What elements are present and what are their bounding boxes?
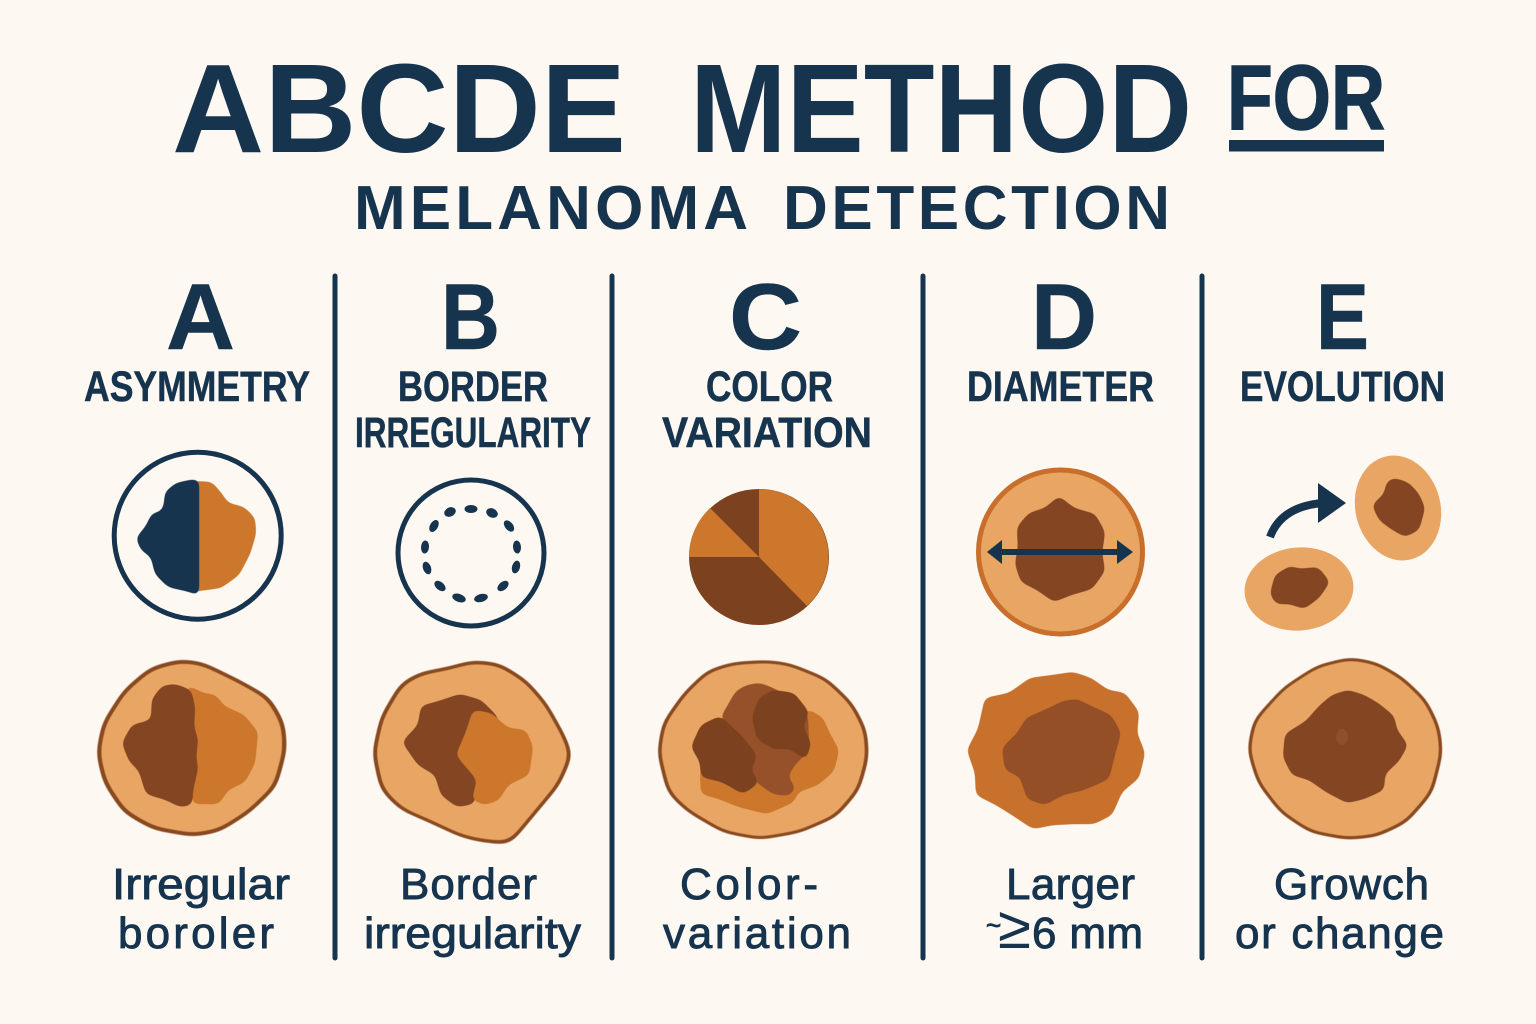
letter C: C xyxy=(729,264,802,369)
title: ABCDE xyxy=(172,38,626,179)
panel: C color variation xyxy=(657,264,872,958)
caption: irregular border: boroler xyxy=(118,909,274,958)
subtitle: MELANOMA xyxy=(354,174,748,243)
caption: color variation: Color- xyxy=(680,860,818,909)
subtitle: DETECTION xyxy=(783,174,1170,243)
caption: larger than 6 mm: Larger xyxy=(1006,860,1135,909)
title: METHOD xyxy=(690,38,1192,179)
icon: dotted border in circle xyxy=(398,480,544,626)
title word: FOR: FOR xyxy=(1227,47,1385,149)
mole illustration: border xyxy=(372,660,573,845)
column dividers xyxy=(335,276,1202,958)
title xyxy=(172,38,1385,179)
letter A: A xyxy=(166,264,235,369)
caption: irregular border: Irregular xyxy=(112,860,290,909)
caption: irregular border xyxy=(112,860,290,958)
icon: diameter measurement xyxy=(978,470,1142,634)
caption: growth or change xyxy=(1235,860,1444,958)
icon: evolving lesion xyxy=(1241,446,1452,635)
heading: diameter: DIAMETER xyxy=(967,363,1154,411)
heading: border irregularity: BORDER xyxy=(398,363,548,411)
caption: border irregularity xyxy=(364,860,581,958)
heading: color variation xyxy=(662,363,872,457)
heading: border irregularity xyxy=(355,363,591,457)
heading: color variation: VARIATION xyxy=(662,409,872,457)
caption: larger than 6 mm: ~ xyxy=(986,910,1001,940)
panel: A asymmetry xyxy=(84,264,310,958)
caption: growth or change: Growch xyxy=(1274,860,1429,909)
caption: growth or change: or change xyxy=(1235,909,1444,958)
letter B: B xyxy=(441,264,500,369)
heading: asymmetry: ASYMMETRY xyxy=(84,363,310,411)
caption: color variation: variation xyxy=(663,909,851,958)
arrow: double-headed width xyxy=(987,540,1133,564)
subtitle xyxy=(354,174,1170,243)
caption: larger than 6 mm: 6 mm xyxy=(1032,909,1143,958)
heading: evolution: EVOLUTION xyxy=(1240,363,1445,411)
icon: color pie chart xyxy=(689,489,829,625)
small lesion: before xyxy=(1241,543,1357,635)
letter D: D xyxy=(1031,264,1097,369)
panel: D diameter xyxy=(967,264,1154,961)
panel: E evolution xyxy=(1235,264,1452,958)
mole illustration: diameter xyxy=(967,672,1145,829)
caption: border irregularity: irregularity xyxy=(364,909,581,958)
caption: color variation xyxy=(663,860,851,958)
icon: asymmetric lesion in circle xyxy=(114,452,281,619)
arrow: change over time xyxy=(1270,483,1346,537)
small lesion: after xyxy=(1344,446,1452,570)
caption: larger than 6 mm: ≥ xyxy=(998,894,1031,961)
heading: color variation: COLOR xyxy=(706,363,833,411)
caption: larger than 6 mm xyxy=(986,860,1143,961)
mole illustration: color variation xyxy=(657,660,869,840)
letter E: E xyxy=(1316,264,1369,369)
heading: border irregularity: IRREGULARITY xyxy=(355,409,591,457)
caption: border irregularity: Border xyxy=(400,860,537,909)
mole illustration: evolution xyxy=(1247,657,1443,840)
panel: B border irregularity xyxy=(355,264,591,958)
mole illustration: asymmetry xyxy=(96,659,287,837)
